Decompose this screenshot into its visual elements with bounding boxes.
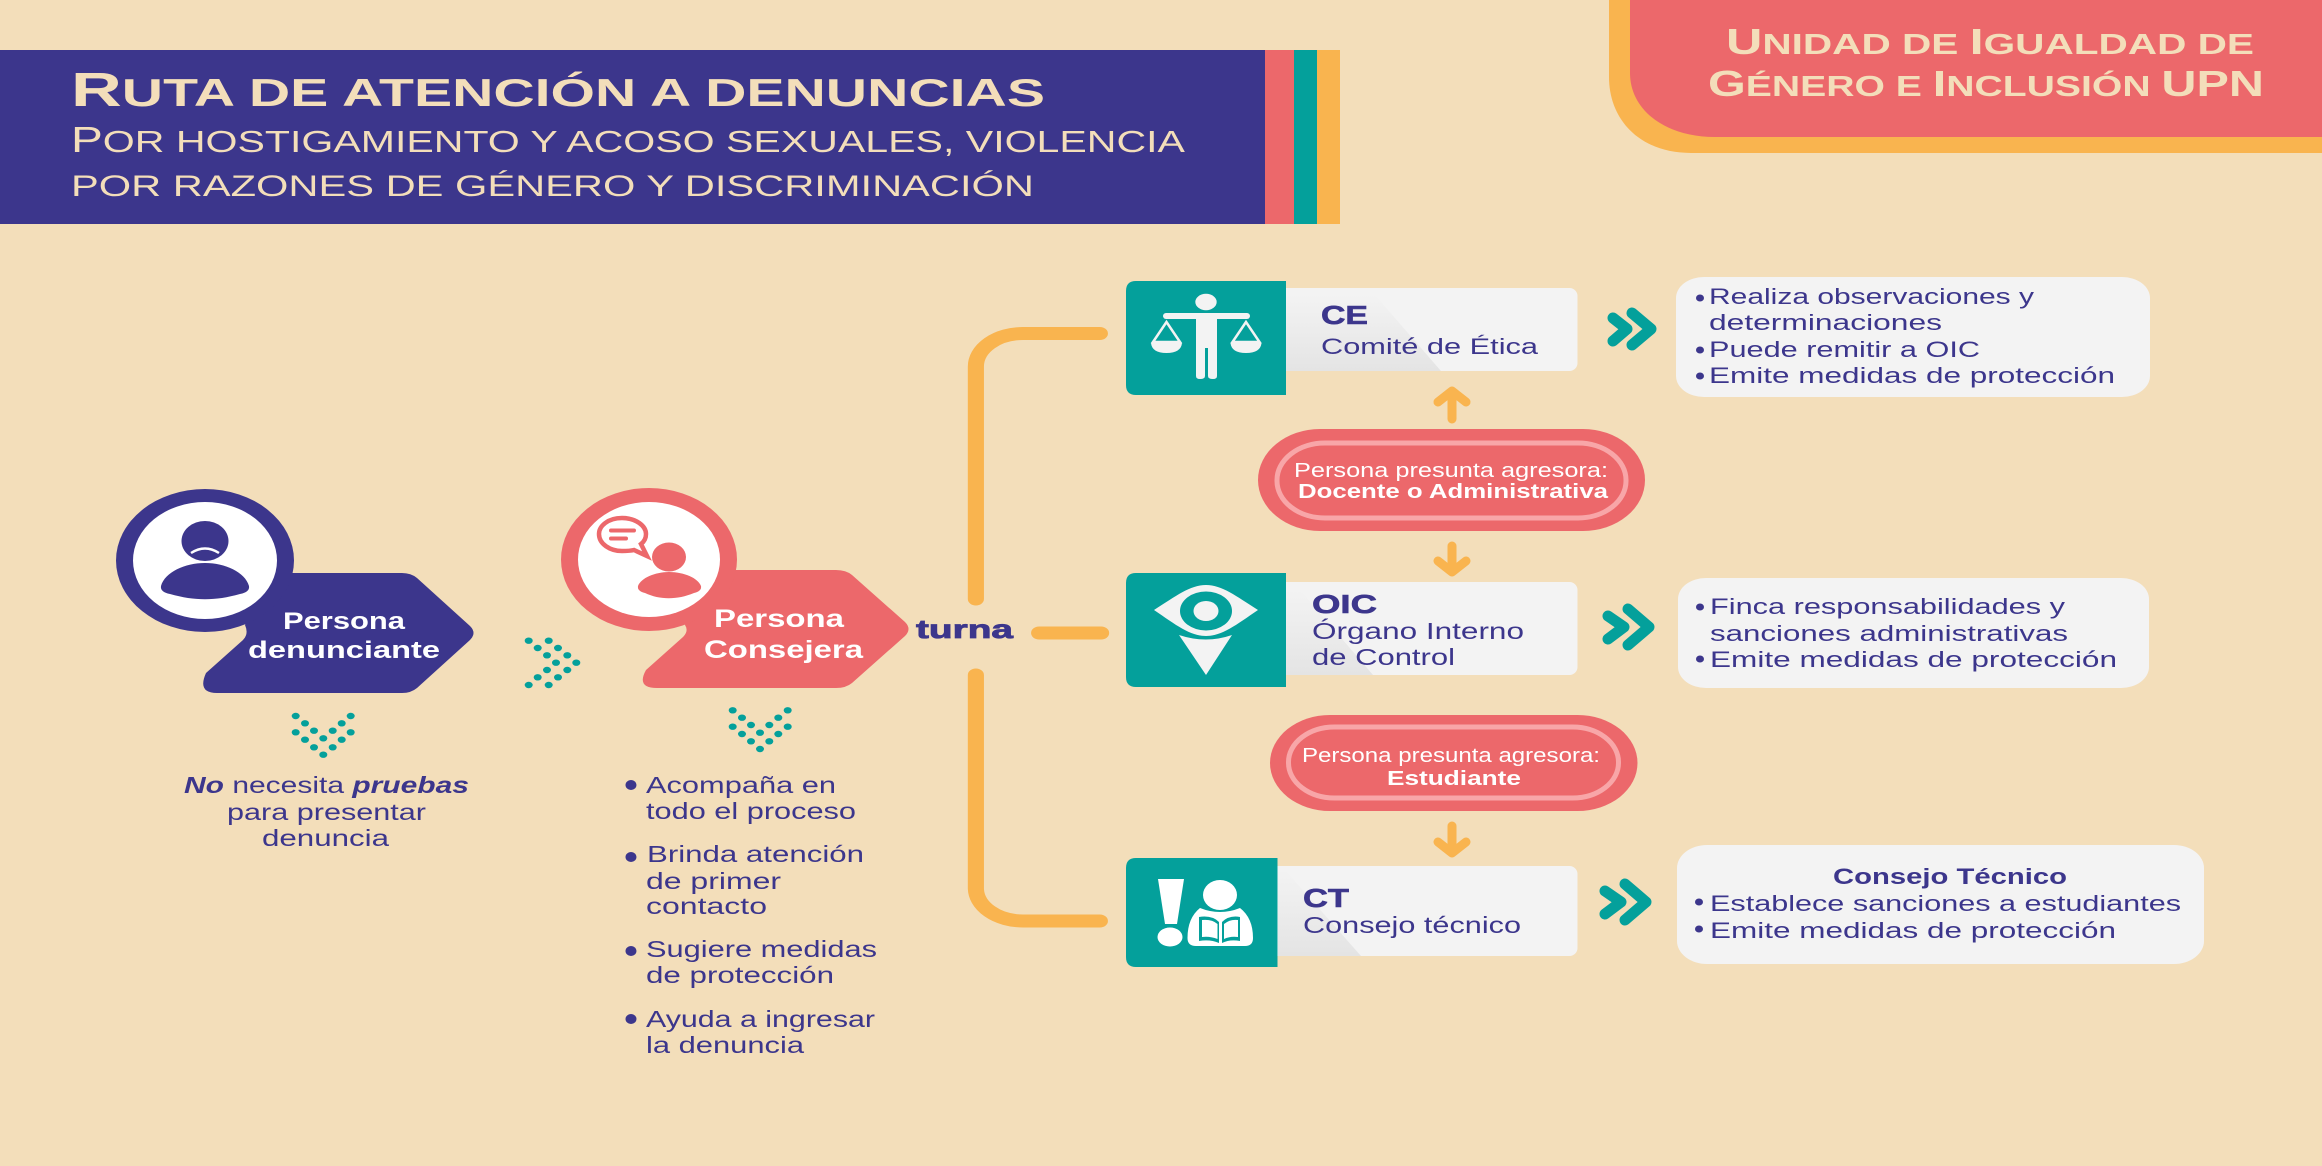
icon: counselor with speech bubble bbox=[599, 518, 701, 598]
list: counselor duties: Ayuda a ingresar bbox=[646, 1006, 875, 1032]
pill: docente o administrativa: Persona presunta agresora: bbox=[1294, 460, 1608, 482]
chevrons: CE bbox=[1613, 313, 1651, 345]
pill: estudiante: Estudiante bbox=[1387, 768, 1521, 790]
list: counselor duties: Brinda atención bbox=[647, 841, 864, 867]
arrow: down to OIC bbox=[1438, 546, 1466, 572]
list: counselor duties: Acompaña en bbox=[646, 772, 836, 798]
step: persona denunciante bbox=[116, 489, 474, 693]
list: counselor duties: Sugiere medidas bbox=[646, 936, 877, 962]
panel: OIC functions bbox=[1678, 578, 2149, 688]
arrow: up to CE bbox=[1438, 391, 1466, 419]
panel: OIC functions: sanciones administrativas bbox=[1710, 621, 2068, 646]
OIC full name: Órgano Interno bbox=[1312, 618, 1524, 644]
label: persona denunciante bbox=[248, 608, 440, 664]
icon: exclamation and reader bbox=[1158, 879, 1253, 946]
unit name line 2: G ÉNERO E INCLUSIÓN UPN bbox=[1708, 63, 2264, 104]
pill: docente o administrativa bbox=[1258, 429, 1645, 531]
CT full name: Consejo técnico bbox=[1303, 912, 1521, 938]
arrow: down to CT bbox=[1438, 826, 1466, 853]
chevrons: CT bbox=[1605, 884, 1646, 920]
panel: OIC functions: Emite medidas de protección bbox=[1710, 647, 2117, 672]
label: turna: turna bbox=[916, 614, 1014, 644]
note: no necesita pruebas: para presentar bbox=[227, 799, 426, 825]
panel: CE functions: Emite medidas de protección bbox=[1709, 363, 2115, 388]
label: persona denunciante: denunciante bbox=[248, 637, 440, 664]
node: CT bbox=[1126, 858, 1578, 967]
list: counselor duties: contacto bbox=[646, 893, 767, 919]
note: no necesita pruebas bbox=[184, 772, 469, 851]
panel: CT functions: Establece sanciones a estudiantes bbox=[1710, 891, 2181, 916]
subtitle line 1: P OR HOSTIGAMIENTO Y ACOSO SEXUALES, VIOLENCIA bbox=[71, 119, 1185, 160]
panel: CE functions: Realiza observaciones y bbox=[1709, 284, 2034, 309]
list: counselor duties: todo el proceso bbox=[646, 798, 856, 824]
OIC acronym: OIC bbox=[1312, 589, 1377, 619]
icon: eye with pointer bbox=[1154, 585, 1258, 675]
OIC full name bbox=[1312, 618, 1524, 670]
panel: CE functions: Puede remitir a OIC bbox=[1709, 337, 1980, 362]
panel: CT functions: Consejo Técnico bbox=[1833, 864, 2067, 889]
pill: estudiante: Persona presunta agresora: bbox=[1302, 745, 1600, 767]
list: counselor duties bbox=[626, 772, 877, 1058]
label: persona consejera bbox=[704, 605, 864, 664]
CE acronym: CE bbox=[1321, 300, 1368, 330]
panel: CT functions: Emite medidas de protección bbox=[1710, 918, 2116, 943]
label: persona denunciante: Persona bbox=[283, 608, 406, 635]
CE full name: Comité de Ética bbox=[1321, 334, 1539, 359]
panel: CE functions: determinaciones bbox=[1709, 310, 1942, 335]
note: no necesita pruebas: No necesita pruebas bbox=[184, 772, 469, 798]
icon: sad person bbox=[161, 521, 249, 599]
subtitle line 2: POR RAZONES DE GÉNERO Y DISCRIMINACIÓN bbox=[71, 170, 1034, 203]
step: persona consejera bbox=[561, 488, 908, 688]
panel: CT functions bbox=[1677, 845, 2204, 964]
node: CE bbox=[1126, 281, 1578, 395]
dotted arrow down 1 bbox=[292, 713, 355, 758]
list: counselor duties: de primer bbox=[646, 868, 781, 894]
CT acronym: CT bbox=[1303, 883, 1349, 913]
label: persona consejera: Consejera bbox=[704, 636, 864, 664]
list: counselor duties: de protección bbox=[646, 962, 834, 988]
icon: scales of justice bbox=[1151, 294, 1262, 379]
note: no necesita pruebas: denuncia bbox=[262, 825, 389, 851]
title: R UTA DE ATENCIÓN A DENUNCIAS bbox=[71, 64, 1045, 117]
unit name line 1: U NIDAD DE IGUALDAD DE bbox=[1726, 21, 2254, 62]
chevrons: OIC bbox=[1608, 609, 1649, 645]
list: counselor duties: la denuncia bbox=[646, 1032, 804, 1058]
OIC full name: de Control bbox=[1312, 644, 1455, 670]
header banner bbox=[0, 50, 1340, 224]
connector bracket bbox=[976, 334, 1101, 921]
dotted arrow right bbox=[525, 638, 580, 688]
pill: docente o administrativa: Docente o Administrativa bbox=[1298, 481, 1609, 503]
dotted arrow down 2 bbox=[729, 707, 792, 752]
panel: OIC functions: Finca responsabilidades y bbox=[1710, 594, 2065, 619]
panel: CE functions bbox=[1676, 277, 2150, 397]
pill: estudiante bbox=[1270, 715, 1638, 811]
node: OIC bbox=[1126, 573, 1578, 687]
label: persona consejera: Persona bbox=[714, 605, 845, 633]
corner tab: unit name bbox=[1609, 0, 2322, 153]
